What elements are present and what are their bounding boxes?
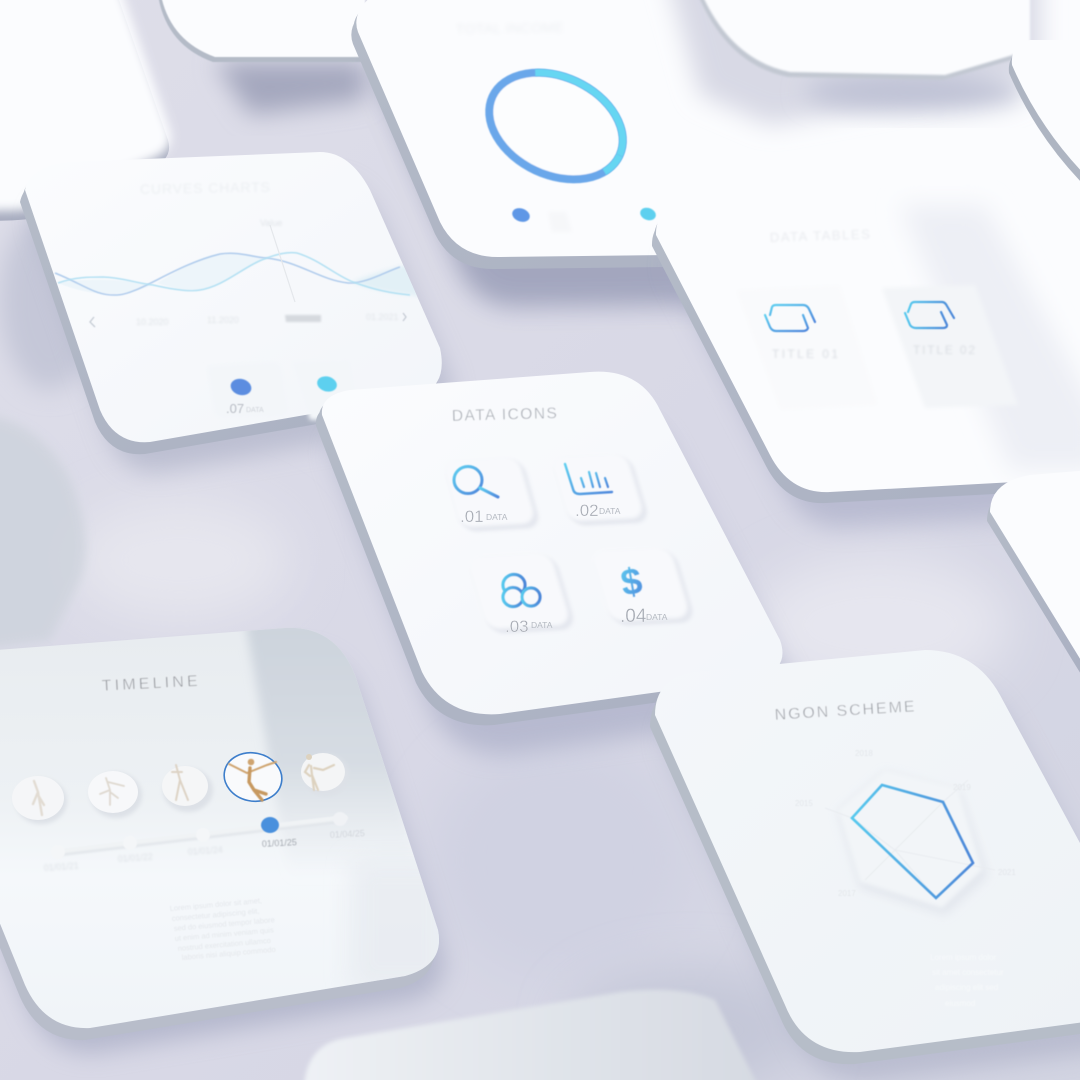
legend dots <box>510 206 658 232</box>
tile: title 01 <box>736 285 878 410</box>
soft shade on the right <box>900 205 1080 470</box>
faint footer text: adipiscing elit sed <box>935 983 998 992</box>
panel: right middle card <box>987 470 1080 684</box>
label: .02 <box>575 501 599 520</box>
icon: dollar: $ <box>618 560 645 604</box>
label: DATA <box>486 512 508 522</box>
timeline dates <box>43 828 365 873</box>
label: .04 <box>620 606 647 627</box>
faint footer text: sit amet consectetur <box>932 968 1004 977</box>
label: TITLE 02 <box>913 343 975 357</box>
label <box>575 501 621 520</box>
label: .03 <box>505 617 529 636</box>
label: DATA <box>531 620 553 630</box>
timeline paragraph: sed do eiusmod tempor labore <box>173 915 275 933</box>
timeline paragraph: Lorem ipsum dolor sit amet, <box>169 896 262 913</box>
faint footer text <box>930 953 1004 1008</box>
panel: ring chart card <box>351 0 1080 307</box>
panel: timeline card <box>0 620 450 1053</box>
label <box>460 507 508 526</box>
ring chart <box>472 52 640 200</box>
axis labels <box>136 218 399 327</box>
icon: three circles <box>503 574 540 606</box>
timeline dates: 01/01/21 <box>43 861 79 873</box>
panel: curves card <box>20 152 452 472</box>
step 1 figure <box>12 776 67 824</box>
label: DATA <box>646 612 668 622</box>
faint footer text: eiusmod <box>945 999 975 1008</box>
refresh icon <box>905 302 954 328</box>
refresh icon <box>765 305 815 331</box>
tile 01 <box>440 455 541 532</box>
right card title: DATA TABLES <box>770 227 870 245</box>
step 4 active figure <box>220 747 286 807</box>
label <box>620 606 668 627</box>
title: NGON SCHEME <box>774 698 915 724</box>
timeline paragraph: ut enim ad minim veniam quis <box>174 925 274 943</box>
timeline paragraph: laboris nisi aliquip commodo <box>181 945 276 962</box>
panel: top right blank card <box>698 0 1030 80</box>
title: DATA ICONS <box>452 405 557 425</box>
wave chart <box>55 225 424 302</box>
data tile 07 <box>207 362 288 418</box>
data tile 08 <box>292 360 360 420</box>
soft shade behind top right <box>665 0 1040 125</box>
data tile 07: .07 <box>226 401 244 416</box>
timeline paragraph <box>169 896 276 962</box>
shadow under top right card <box>805 72 1025 112</box>
panel: data icons card <box>316 372 792 754</box>
radar chart <box>795 749 1016 915</box>
radar labels: 2017 <box>838 889 856 898</box>
radar labels: 2015 <box>795 799 813 808</box>
axis labels: 11.2020 <box>207 315 239 325</box>
panel: ngon scheme card <box>650 650 1080 1080</box>
timeline dates: 01/01/25 <box>262 837 297 849</box>
panel: left blurred card <box>0 415 86 650</box>
radar labels: 2018 <box>855 749 873 758</box>
timeline dates: 01/01/24 <box>187 845 223 857</box>
data tile 07: DATA <box>246 407 264 414</box>
label <box>505 617 553 636</box>
chevrons <box>90 313 406 327</box>
axis labels: Value <box>260 218 282 228</box>
icon: magnifier <box>454 466 498 497</box>
axis labels: 01.2021 <box>366 312 399 322</box>
timeline paragraph: consectetur adipiscing elit, <box>171 906 260 923</box>
tile 04 <box>588 546 696 627</box>
timeline paragraph: nostrud exercitation ullamco <box>177 936 271 953</box>
ring card title: TOTAL INCOME <box>456 19 564 37</box>
tile 03 <box>464 551 576 636</box>
radar labels: 2021 <box>998 868 1016 877</box>
curves title: CURVES CHARTS <box>140 179 270 197</box>
panel: top middle blank card <box>158 0 365 115</box>
faint footer text: Lorem ipsum dolor <box>930 953 997 962</box>
radar labels: 2019 <box>953 783 971 792</box>
timeline dates: 01/01/22 <box>117 852 153 864</box>
step 2 figure <box>88 771 142 818</box>
shaded band <box>244 628 439 976</box>
radar labels <box>795 749 1016 898</box>
label: TITLE 01 <box>772 347 838 361</box>
title: TIMELINE <box>101 673 198 695</box>
timeline dates: 01/04/25 <box>330 828 365 840</box>
active handle <box>261 817 279 833</box>
tile: title 02 <box>882 285 1018 408</box>
step 3 figure <box>162 765 213 812</box>
timeline slider <box>51 812 347 859</box>
axis labels: 10.2020 <box>136 317 169 327</box>
panel: far right top card <box>1009 40 1080 188</box>
label: .01 <box>460 507 484 526</box>
panel: right icons card <box>652 180 1080 527</box>
tile 02 <box>548 452 650 526</box>
label: DATA <box>599 506 621 516</box>
icon: bar chart <box>565 464 612 494</box>
panel: bottom blurred card <box>304 990 760 1080</box>
panel: top left blank card <box>0 0 171 221</box>
step 5 figure <box>301 753 349 796</box>
